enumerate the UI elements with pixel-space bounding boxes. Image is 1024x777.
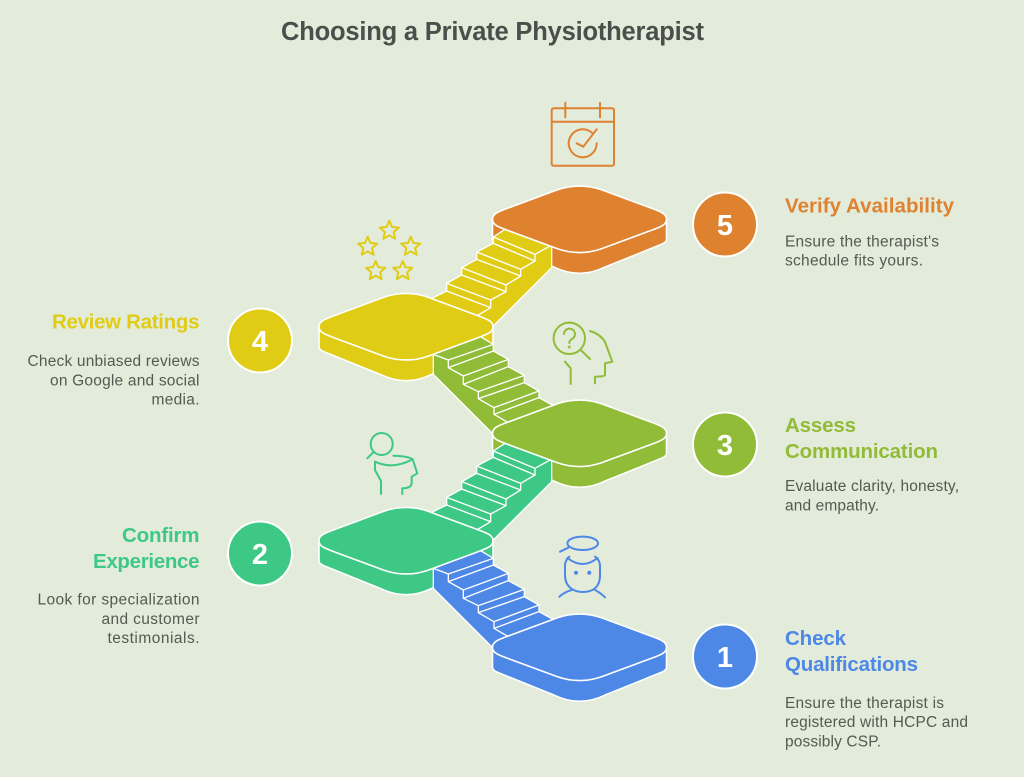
step 2 heading: Experience bbox=[93, 550, 200, 573]
step 2 description bbox=[38, 592, 200, 647]
icon: head with question magnifier bbox=[554, 323, 612, 384]
platform tops bbox=[319, 186, 666, 681]
step 2 heading bbox=[93, 524, 200, 573]
stairs: yellow, from step 4 up to step 5 bbox=[431, 229, 552, 326]
step 1 heading: Qualifications bbox=[785, 653, 918, 676]
step 4 heading: Review Ratings bbox=[52, 310, 200, 334]
step 2 badge bbox=[228, 522, 292, 586]
step 5 badge bbox=[693, 192, 757, 256]
step 2 description: and customer bbox=[102, 611, 200, 628]
step 3 description bbox=[785, 478, 959, 514]
step 1 heading: Check bbox=[785, 627, 847, 650]
icon: five stars bbox=[358, 221, 420, 279]
icon: head with magnifier bbox=[367, 433, 417, 494]
step 1 description bbox=[785, 695, 968, 750]
step 4 description: on Google and social bbox=[50, 372, 200, 390]
step 2 heading: Confirm bbox=[122, 524, 200, 547]
step 3 heading bbox=[785, 414, 938, 463]
step 1 description: registered with HCPC and bbox=[785, 714, 968, 731]
step 2 badge: 2 bbox=[252, 539, 268, 571]
step 1 heading bbox=[785, 627, 918, 676]
step 1 badge bbox=[693, 624, 757, 688]
step 3 badge bbox=[693, 412, 757, 476]
stairs: lime, from step 4 down to step 3 bbox=[433, 335, 554, 434]
step 5 heading: Verify Availability bbox=[785, 194, 955, 218]
step 3 description: Evaluate clarity, honesty, bbox=[785, 478, 959, 495]
step 5 badge: 5 bbox=[717, 210, 733, 242]
step 3 heading: Assess bbox=[785, 414, 856, 437]
step 2 description: testimonials. bbox=[108, 630, 200, 647]
title: Choosing a Private Physiotherapist bbox=[281, 18, 704, 46]
icon: person with halo bbox=[559, 537, 605, 597]
step 2 description: Look for specialization bbox=[38, 592, 200, 608]
step 3 description: and empathy. bbox=[785, 498, 879, 514]
step 4 badge bbox=[228, 308, 292, 372]
stairs: green, from step 2 up to step 3 bbox=[431, 443, 552, 540]
platform sides bbox=[319, 219, 666, 701]
step 4 badge: 4 bbox=[252, 326, 268, 358]
step 4 description: media. bbox=[152, 392, 200, 408]
step 4 description: Check unbiased reviews bbox=[28, 353, 200, 370]
step 3 badge: 3 bbox=[717, 430, 733, 462]
stairs: blue, from step 2 down to step 1 bbox=[433, 549, 554, 648]
step 1 description: Ensure the therapist is bbox=[785, 695, 944, 712]
step 5 description: Ensure the therapist's bbox=[785, 234, 939, 250]
step 5 description: schedule fits yours. bbox=[785, 252, 923, 270]
step 1 description: possibly CSP. bbox=[785, 734, 881, 750]
step 5 description bbox=[785, 234, 939, 270]
icon: calendar with check bbox=[552, 103, 614, 166]
step 1 badge: 1 bbox=[717, 642, 733, 674]
step 3 heading: Communication bbox=[785, 440, 938, 463]
step 4 description bbox=[28, 353, 200, 408]
